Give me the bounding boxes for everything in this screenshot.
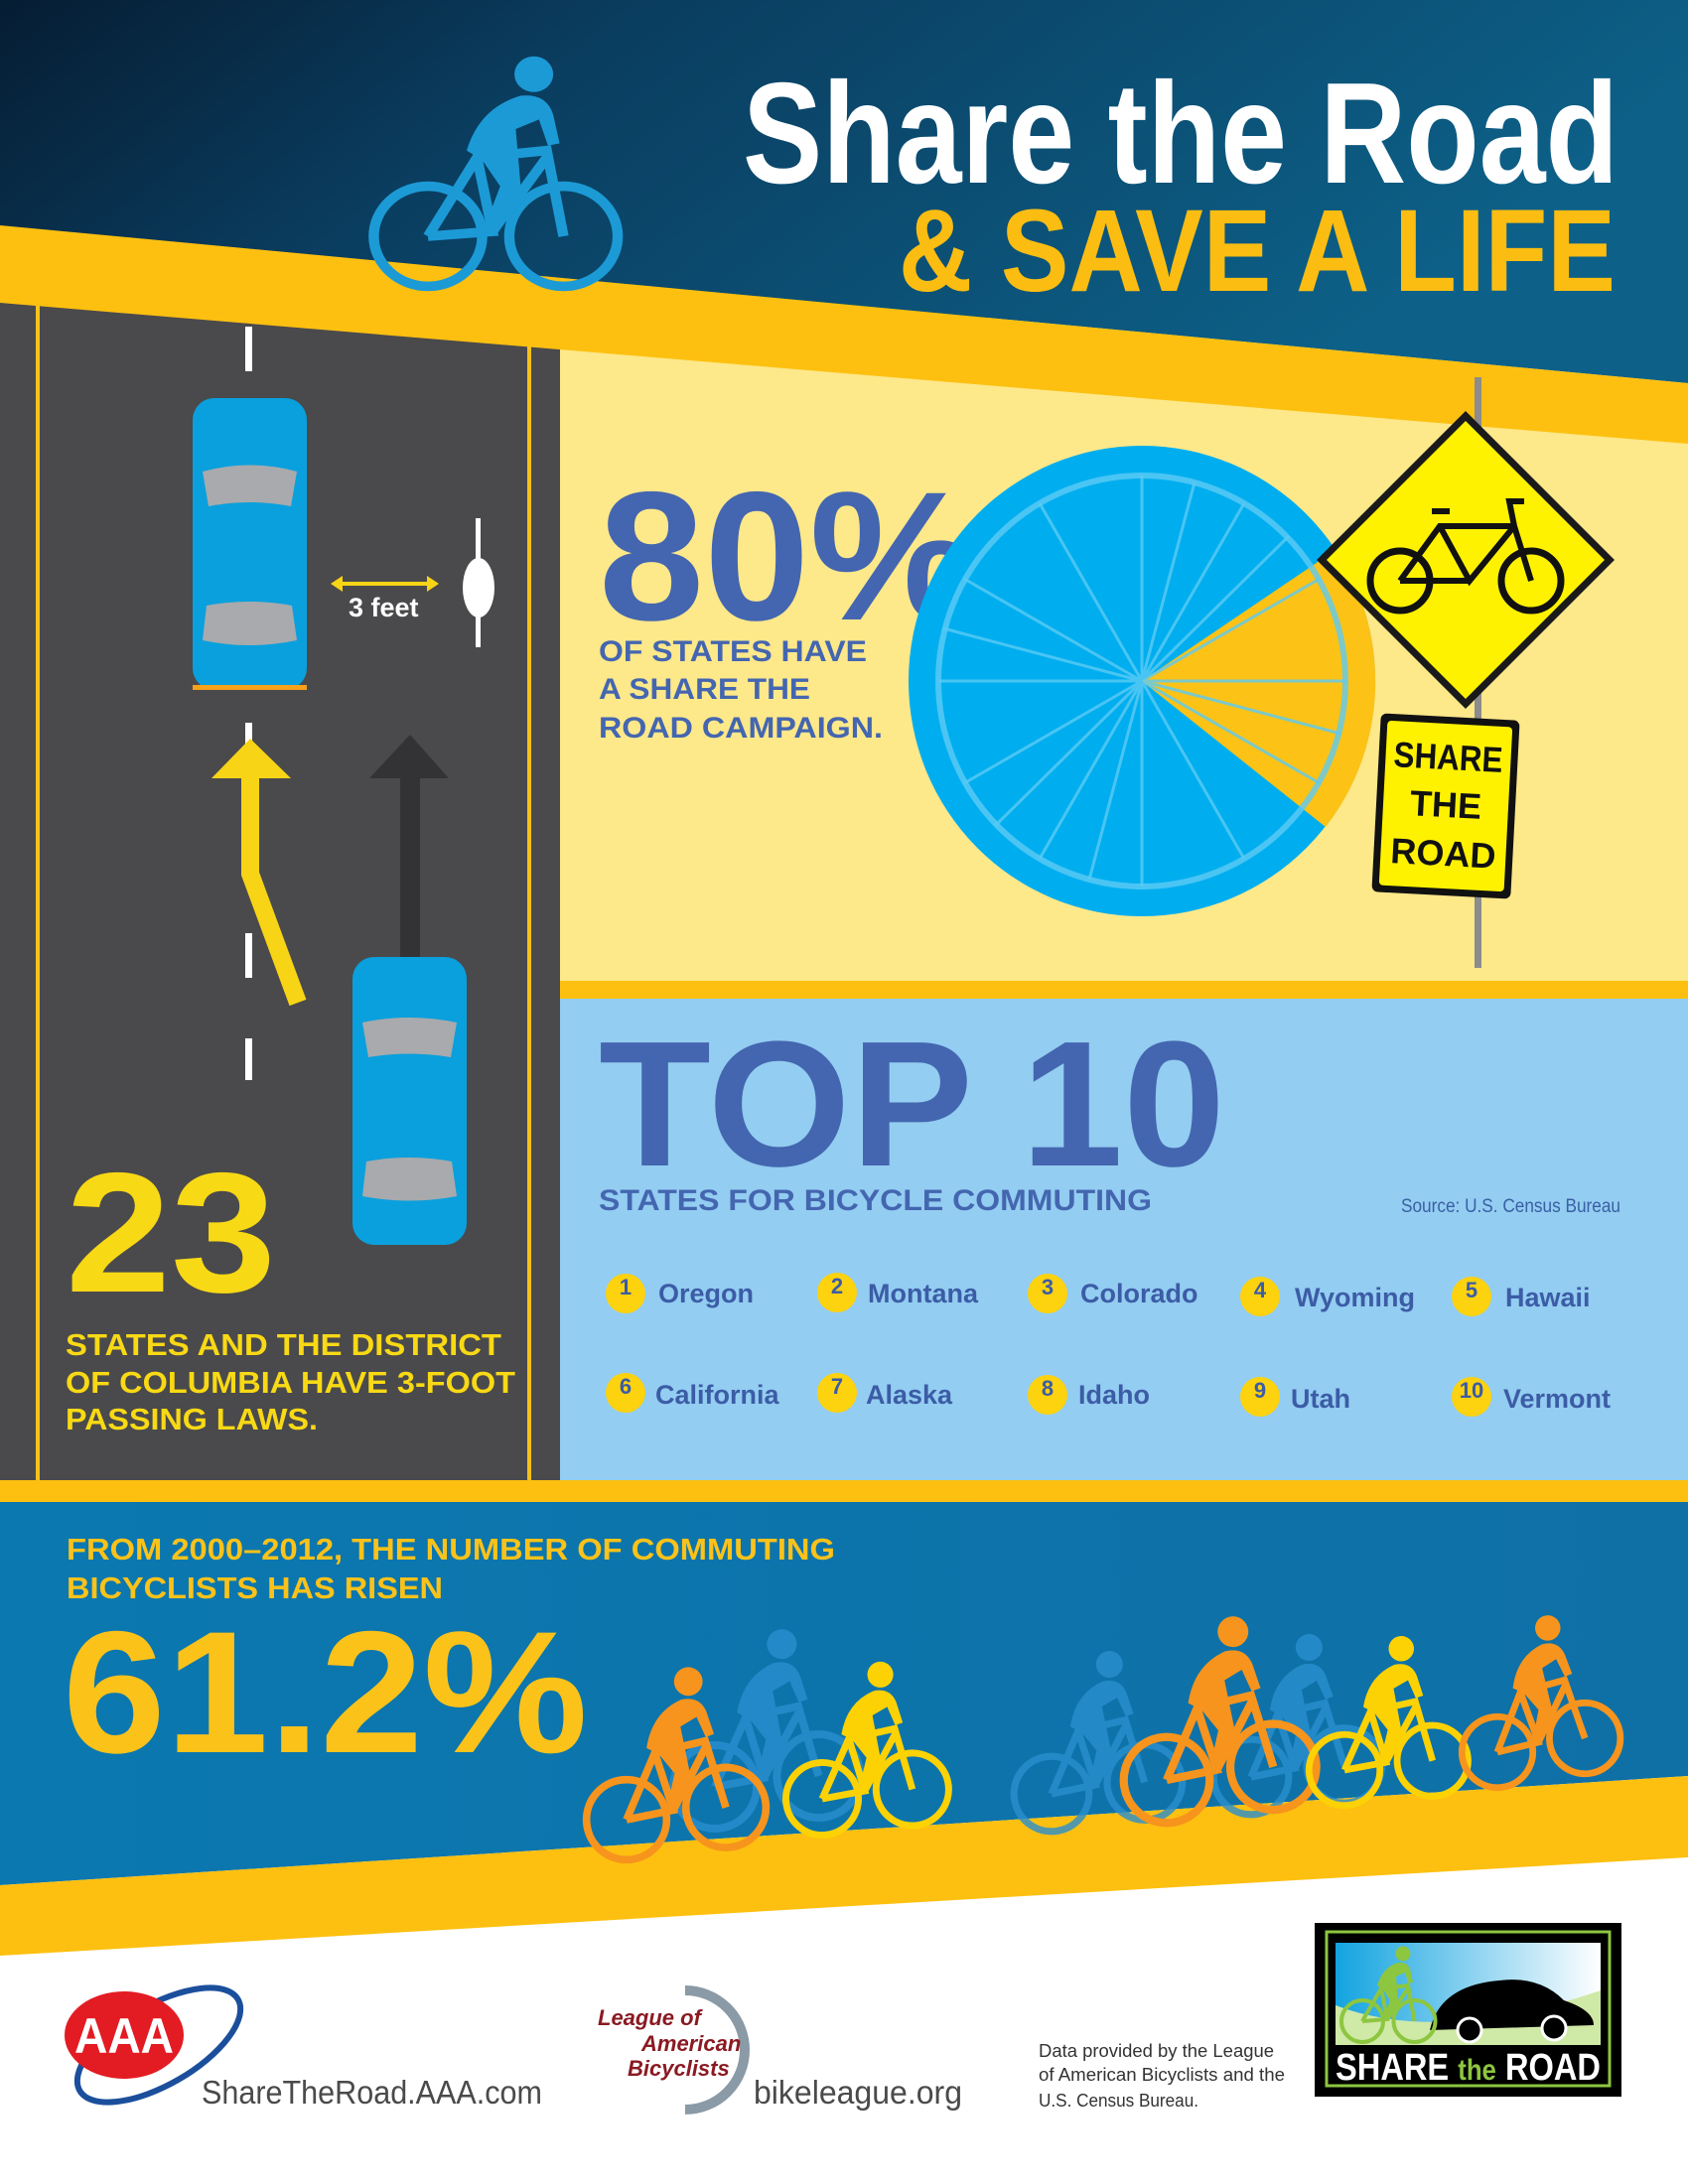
panel: road — [0, 298, 560, 1484]
stat: 23 states: STATES AND THE DISTRICT — [66, 1327, 501, 1362]
icon: share the road sign — [1371, 713, 1520, 899]
icon: share the road sign: SHARE — [1393, 734, 1504, 780]
panel: commuting growth: BICYCLISTS HAS RISEN — [67, 1570, 443, 1605]
yellow diagonal band — [0, 225, 1688, 444]
state list: California — [655, 1380, 780, 1410]
state list: 10 — [1460, 1378, 1483, 1403]
state list: 8 — [1042, 1376, 1054, 1401]
text: from 2000-2012: FROM 2000–2012, THE NUMBER OF COMMUTING — [67, 1532, 835, 1567]
stat: 23 states: PASSING LAWS. — [66, 1402, 318, 1436]
stat: 80%: 80% — [599, 455, 978, 659]
arrow: yellow passing — [211, 739, 298, 1003]
text: data credit — [1039, 2041, 1285, 2111]
icon: group of cyclists — [569, 1607, 1625, 1864]
stat: 80% — [599, 455, 978, 745]
logo: share the road badge: SHARE the ROAD — [1336, 2047, 1601, 2089]
state list: 3 — [1042, 1275, 1054, 1299]
icon: bike crossing sign — [1317, 377, 1615, 968]
logo: league of american bicyclists — [598, 1990, 745, 2110]
logo: share the road badge — [1315, 1923, 1621, 2097]
icon: share the road sign: ROAD — [1390, 830, 1497, 877]
stat: 23 states: 23 — [66, 1138, 276, 1328]
stat: 23 states — [66, 1138, 515, 1436]
chart: wheel pie 80% — [909, 446, 1375, 916]
state list: 4 — [1254, 1278, 1267, 1302]
state list: Oregon — [658, 1279, 754, 1308]
stat: 80%: OF STATES HAVE — [599, 635, 867, 668]
state list: Wyoming — [1295, 1283, 1415, 1312]
heading: top 10: TOP 10 — [599, 1005, 1225, 1204]
stat: 80%: A SHARE THE — [599, 673, 810, 706]
state list: Alaska — [866, 1380, 953, 1410]
state list: 9 — [1254, 1378, 1266, 1403]
panel: commuting growth — [0, 1502, 1688, 1956]
stat: 23 states: OF COLUMBIA HAVE 3-FOOT — [66, 1365, 515, 1400]
car: bottom — [352, 957, 467, 1245]
state list: Colorado — [1080, 1279, 1197, 1308]
state list: Idaho — [1078, 1380, 1150, 1410]
text: data credit: Data provided by the League — [1039, 2041, 1274, 2061]
state list: 7 — [831, 1374, 843, 1399]
state list: Vermont — [1503, 1384, 1611, 1414]
panel: top 10 — [560, 999, 1688, 1481]
state list: Utah — [1291, 1384, 1350, 1414]
header background — [0, 0, 1688, 417]
panel: top 10: Source: U.S. Census Bureau — [1401, 1196, 1620, 1217]
divider stripe — [0, 1480, 1688, 1502]
3 feet arrow label — [331, 576, 439, 622]
divider stripe — [560, 981, 1688, 999]
logo: AAA — [60, 1965, 258, 2125]
logo: league of american bicyclists: League of — [598, 2005, 704, 2030]
stat: 61.2%: 61.2% — [63, 1596, 588, 1790]
state list — [606, 1273, 1611, 1417]
state list: Hawaii — [1505, 1283, 1591, 1312]
arrow: dark straight — [369, 735, 449, 957]
logo: AAA: AAA — [74, 2008, 174, 2064]
icon: cyclist top view — [463, 518, 494, 647]
icon: header cyclist — [373, 57, 618, 286]
title — [743, 53, 1618, 317]
icon: share the road sign: THE — [1409, 782, 1482, 827]
panel: light yellow stat area — [560, 318, 1688, 983]
state list: 6 — [620, 1374, 632, 1399]
state list: 5 — [1466, 1278, 1477, 1302]
3 feet arrow label: 3 feet — [349, 593, 419, 622]
header dark top — [0, 0, 1688, 383]
text: data credit: of American Bicyclists and the — [1039, 2065, 1285, 2085]
state list: 2 — [831, 1274, 843, 1298]
logo: league of american bicyclists: American — [640, 2031, 741, 2056]
text: sharetheroad url: ShareTheRoad.AAA.com — [202, 2074, 542, 2111]
state list: 1 — [620, 1275, 632, 1299]
stat: 80%: ROAD CAMPAIGN. — [599, 712, 883, 745]
logo: league of american bicyclists: Bicyclists — [628, 2056, 730, 2081]
panel: top 10: STATES FOR BICYCLE COMMUTING — [599, 1184, 1152, 1217]
state list: Montana — [868, 1279, 979, 1308]
text: data credit: U.S. Census Bureau. — [1039, 2091, 1198, 2111]
car: top — [193, 398, 307, 690]
text: bikeleague url: bikeleague.org — [754, 2074, 962, 2111]
